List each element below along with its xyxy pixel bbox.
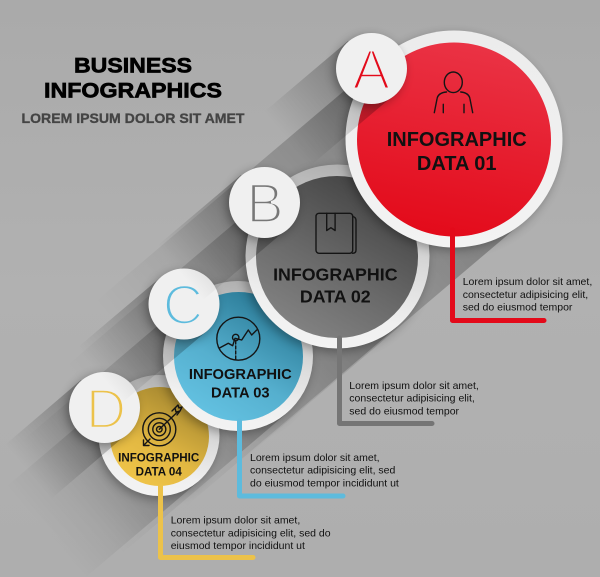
label: data 02: INFOGRAPHIC bbox=[273, 265, 398, 285]
icon: person bbox=[434, 72, 473, 113]
leader line D bbox=[160, 486, 253, 558]
leader line A bbox=[452, 230, 544, 320]
leader line C bbox=[240, 421, 343, 496]
leader line B bbox=[340, 338, 432, 424]
badge B bbox=[157, 167, 300, 300]
text block A: sed do eiusmod tempor bbox=[463, 302, 573, 314]
icon: book bbox=[316, 213, 356, 253]
text block A: Lorem ipsum dolor sit amet, bbox=[463, 276, 592, 288]
label: data 01: INFOGRAPHIC bbox=[387, 129, 527, 151]
text block B: sed do eiusmod tempor bbox=[349, 405, 460, 417]
panel: circle B bbox=[243, 164, 432, 424]
panel: circle C bbox=[161, 281, 343, 496]
badge C bbox=[77, 268, 220, 402]
title bbox=[44, 54, 222, 103]
text block A: consectetur adipisicing elit, bbox=[463, 289, 588, 301]
title: BUSINESS bbox=[74, 54, 192, 77]
text block B: consectetur adipisicing elit, bbox=[349, 393, 475, 405]
icon: target bbox=[143, 405, 182, 446]
badge D: D bbox=[86, 377, 126, 440]
title: INFOGRAPHICS bbox=[44, 80, 222, 103]
label: data 04: DATA 04 bbox=[136, 466, 182, 479]
panel: circle A bbox=[344, 30, 562, 320]
text block C: do eiusmod tempor incididunt ut bbox=[250, 477, 399, 489]
text block D: consectetur adipisicing elit, sed do bbox=[171, 527, 331, 539]
text block C: Lorem ipsum dolor sit amet, bbox=[250, 452, 380, 464]
text block B: Lorem ipsum dolor sit amet, bbox=[349, 380, 479, 392]
badge A bbox=[264, 33, 407, 166]
badge B: B bbox=[246, 172, 284, 234]
long shadows bbox=[6, 57, 524, 577]
panel: circle D bbox=[97, 375, 253, 558]
label: data 03: INFOGRAPHIC bbox=[189, 367, 292, 383]
text block D: eiusmod tempor incididunt ut bbox=[171, 540, 305, 552]
text block D: Lorem ipsum dolor sit amet, bbox=[171, 514, 300, 526]
label: data 03: DATA 03 bbox=[211, 385, 270, 401]
badge D bbox=[5, 372, 140, 499]
label: data 04: INFOGRAPHIC bbox=[118, 452, 200, 465]
icon: chart in circle bbox=[217, 317, 260, 360]
label: data 01: DATA 01 bbox=[417, 153, 497, 175]
label: data 02: DATA 02 bbox=[300, 287, 371, 307]
subtitle: LOREM IPSUM DOLOR SIT AMET bbox=[22, 111, 245, 126]
badge A: A bbox=[353, 38, 391, 100]
badge C: C bbox=[163, 273, 203, 336]
text block C: consectetur adipisicing elit, sed bbox=[250, 465, 395, 477]
